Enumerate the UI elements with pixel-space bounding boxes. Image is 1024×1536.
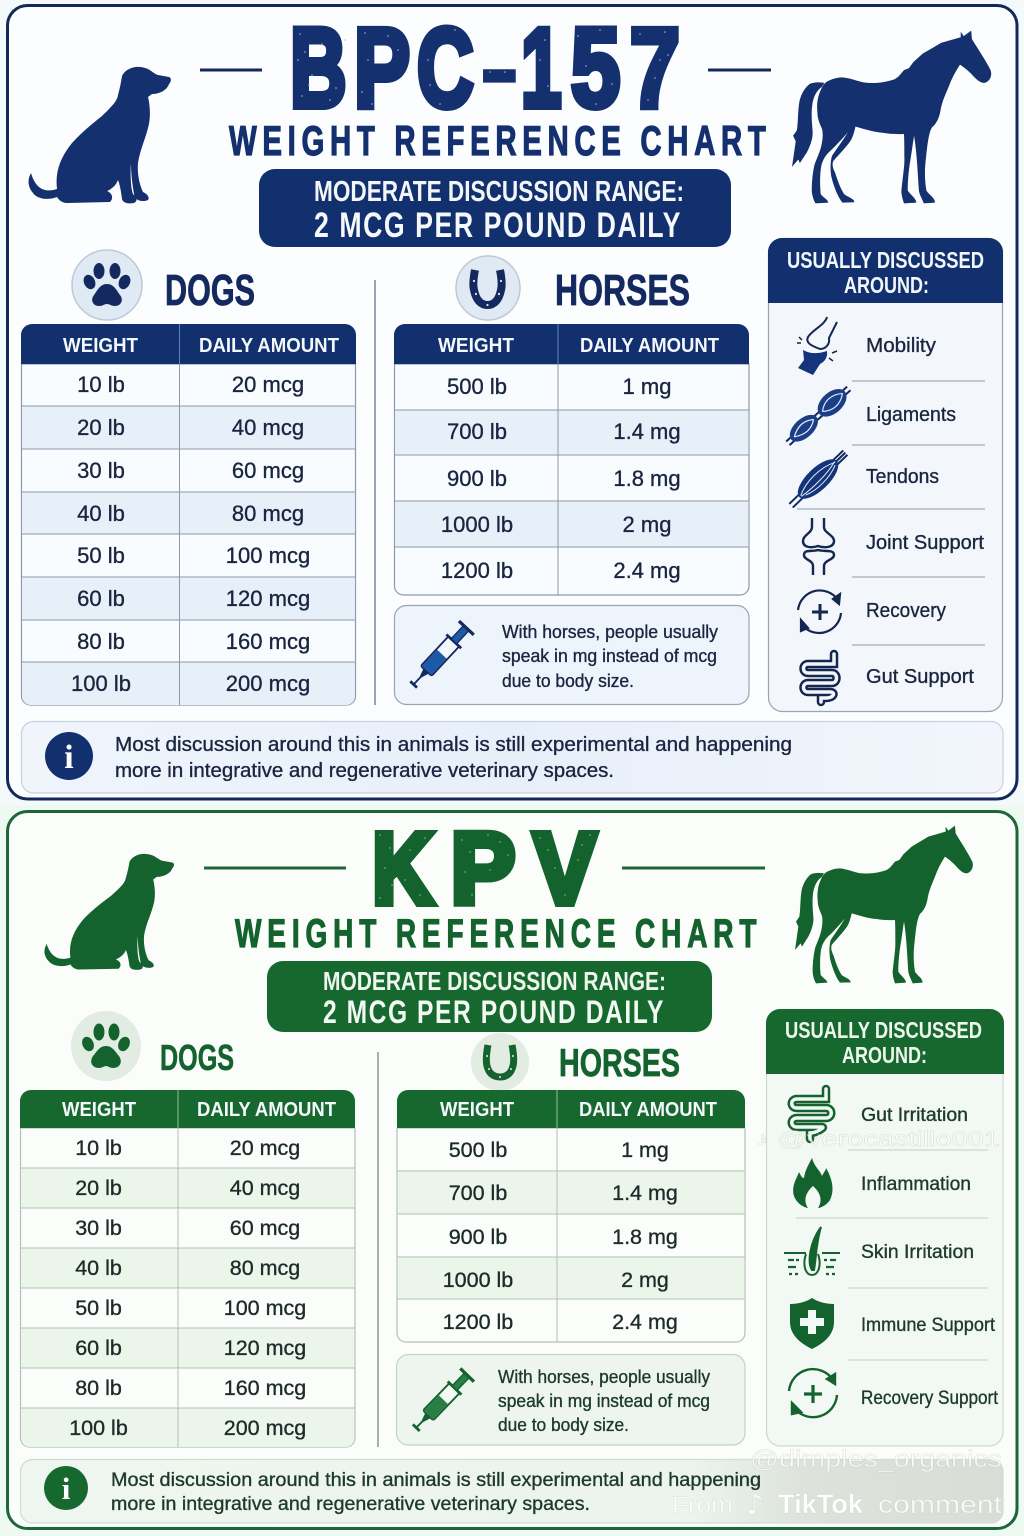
table header: WEIGHT bbox=[62, 1099, 136, 1121]
table body rows bbox=[22, 364, 356, 705]
table body rows: 500 lb bbox=[447, 374, 507, 399]
note text bbox=[502, 621, 719, 691]
panel: usually discussed around bbox=[766, 1009, 1004, 1446]
item: gut support bbox=[804, 654, 974, 702]
table body rows: 10 lb bbox=[77, 372, 125, 397]
note text: With horses, people usually bbox=[498, 1367, 710, 1387]
table body rows: 100 mcg bbox=[226, 543, 310, 568]
title: KPV: P bbox=[451, 812, 515, 924]
icon: joint bbox=[803, 518, 834, 575]
title: BPC-157: - bbox=[478, 4, 521, 129]
title: BPC-157: P bbox=[354, 5, 410, 130]
decorative title dash right bbox=[622, 866, 765, 870]
table header bbox=[20, 1090, 355, 1128]
item: recovery support bbox=[789, 1369, 999, 1417]
table body rows: 1 mg bbox=[621, 1138, 669, 1162]
panel: KPV bbox=[8, 812, 1017, 1528]
table body rows: 60 mcg bbox=[230, 1216, 300, 1240]
icon: intestines bbox=[792, 1089, 831, 1139]
table body rows: 50 lb bbox=[75, 1296, 122, 1320]
side panel header: AROUND: bbox=[842, 1042, 927, 1068]
note text: speak in mg instead of mcg bbox=[498, 1391, 710, 1411]
table body rows: 700 lb bbox=[449, 1181, 507, 1205]
note text bbox=[498, 1367, 710, 1435]
title: BPC-157: 1 bbox=[521, 6, 561, 131]
table body rows bbox=[397, 1128, 745, 1342]
icon: info bbox=[44, 1466, 88, 1510]
item: gut support: Gut Support bbox=[866, 666, 974, 688]
title: KPV: K bbox=[372, 812, 433, 925]
icon: horseshoe bbox=[456, 256, 520, 320]
table body rows: 60 mcg bbox=[232, 458, 304, 483]
table header bbox=[21, 324, 356, 364]
icon: horseshoe bbox=[471, 1033, 529, 1091]
heading: dogs: DOGS bbox=[165, 266, 255, 315]
item: joint support: Joint Support bbox=[866, 532, 984, 554]
info text: Most discussion around this in animals is still experimental and happening bbox=[111, 1470, 761, 1491]
heading: horses: HORSES bbox=[559, 1042, 680, 1085]
item: skin irritation: Skin Irritation bbox=[861, 1242, 974, 1263]
title: KPV bbox=[372, 812, 596, 925]
item: tendons bbox=[783, 445, 939, 513]
info text: more in integrative and regenerative veterinary spaces. bbox=[115, 760, 614, 782]
info text: Most discussion around this in animals is still experimental and happening bbox=[115, 734, 792, 756]
table body rows bbox=[20, 1128, 355, 1447]
callout line 2: 2 MCG PER POUND DAILY bbox=[314, 206, 682, 245]
table body rows: 1200 lb bbox=[441, 558, 513, 583]
table body rows: 1 mg bbox=[623, 374, 671, 399]
title: BPC-157: 7 bbox=[630, 6, 680, 131]
table body rows: 200 mcg bbox=[226, 671, 310, 696]
table: horses weight and daily amount bbox=[397, 1090, 745, 1342]
watermark: TikTok comment: From bbox=[672, 1492, 733, 1519]
item: mobility: Mobility bbox=[866, 335, 936, 357]
info text bbox=[115, 734, 792, 782]
item: gut irritation bbox=[792, 1089, 968, 1139]
info text: more in integrative and regenerative veterinary spaces. bbox=[111, 1494, 590, 1515]
heading: horses: HORSES bbox=[555, 266, 690, 315]
title: BPC-157: 5 bbox=[571, 7, 620, 131]
watermark: handle top: ♪ @verocastillo001 bbox=[755, 1128, 1000, 1151]
divider bbox=[374, 280, 376, 705]
table body rows: 1.4 mg bbox=[613, 419, 681, 444]
table body rows: 1.8 mg bbox=[612, 1225, 678, 1249]
icon: horse silhouette bbox=[795, 826, 973, 983]
item: inflammation: Inflammation bbox=[861, 1174, 971, 1195]
title: BPC-157: B bbox=[290, 6, 347, 131]
table body rows: 50 lb bbox=[77, 543, 125, 568]
subtitle: weight reference chart: WEIGHT REFERENCE CHART bbox=[235, 912, 756, 956]
subtitle: weight reference chart: WEIGHT REFERENCE CHART bbox=[229, 117, 766, 164]
table header: WEIGHT bbox=[438, 335, 514, 357]
table body rows: 700 lb bbox=[447, 419, 507, 444]
item: recovery support: Recovery Support bbox=[861, 1388, 999, 1409]
table body rows: 2.4 mg bbox=[612, 1310, 678, 1334]
callout line 1: MODERATE DISCUSSION RANGE: bbox=[323, 966, 666, 996]
icon: dog paw bbox=[72, 250, 142, 320]
table body rows: 500 lb bbox=[449, 1138, 507, 1162]
title: BPC-157 bbox=[290, 4, 680, 131]
icon: recovery cycle bbox=[798, 590, 841, 633]
table body rows: 10 lb bbox=[75, 1136, 122, 1160]
table body rows: 160 mcg bbox=[226, 629, 310, 654]
table header: DAILY AMOUNT bbox=[579, 1099, 717, 1121]
table body rows: 1.8 mg bbox=[613, 466, 681, 491]
icon: info bbox=[45, 732, 93, 780]
item: tendons: Tendons bbox=[866, 466, 939, 488]
side panel header bbox=[768, 238, 1003, 303]
item: ligaments: Ligaments bbox=[866, 404, 956, 426]
item: gut irritation: Gut Irritation bbox=[861, 1105, 968, 1126]
callout: moderate discussion range bbox=[267, 961, 712, 1032]
table body rows: 20 lb bbox=[77, 415, 125, 440]
table body rows: 100 lb bbox=[69, 1416, 128, 1440]
table body rows: 160 mcg bbox=[224, 1376, 306, 1400]
table body rows: 80 mcg bbox=[230, 1256, 300, 1280]
icon: flame bbox=[793, 1158, 833, 1208]
table header: WEIGHT bbox=[440, 1099, 514, 1121]
divider bbox=[377, 1052, 379, 1447]
table header: DAILY AMOUNT bbox=[197, 1099, 336, 1121]
note text: due to body size. bbox=[502, 670, 634, 691]
icon: dog silhouette bbox=[44, 854, 174, 970]
title: KPV: V bbox=[534, 814, 596, 925]
table: horses weight and daily amount bbox=[394, 324, 749, 595]
icon: tendons bbox=[783, 445, 853, 513]
table body rows: 1000 lb bbox=[443, 1268, 513, 1292]
table body rows: 2.4 mg bbox=[613, 558, 681, 583]
panel: BPC-157 bbox=[8, 4, 1017, 799]
item: joint support bbox=[803, 518, 984, 575]
icon: ligaments bbox=[781, 380, 855, 451]
icon: info: i bbox=[64, 739, 74, 776]
table header: DAILY AMOUNT bbox=[580, 335, 719, 357]
callout: moderate discussion range bbox=[259, 169, 731, 247]
note text: due to body size. bbox=[498, 1415, 629, 1435]
table body rows: 120 mcg bbox=[226, 586, 310, 611]
table header bbox=[397, 1090, 745, 1128]
table body rows: 2 mg bbox=[623, 512, 671, 537]
title: BPC-157: C bbox=[417, 6, 474, 131]
table body rows: 40 lb bbox=[75, 1256, 122, 1280]
item: immune support: Immune Support bbox=[861, 1315, 996, 1336]
side panel header bbox=[766, 1009, 1004, 1074]
table body rows: 1200 lb bbox=[443, 1310, 513, 1334]
table body rows: 20 lb bbox=[75, 1176, 122, 1200]
decorative title dash right bbox=[708, 68, 771, 72]
item: ligaments bbox=[781, 380, 956, 451]
icon: horse silhouette bbox=[792, 31, 991, 203]
table body rows: 40 mcg bbox=[232, 415, 304, 440]
icon: dog paw bbox=[71, 1011, 141, 1081]
icon: info: i bbox=[62, 1471, 71, 1506]
item: skin irritation bbox=[784, 1227, 974, 1275]
item: recovery bbox=[798, 590, 946, 633]
heading: dogs: DOGS bbox=[160, 1037, 234, 1078]
callout line 2: 2 MCG PER POUND DAILY bbox=[323, 994, 665, 1030]
icon: dog silhouette bbox=[29, 67, 171, 203]
watermark: TikTok comment bbox=[672, 1488, 1002, 1521]
table body rows: 900 lb bbox=[447, 466, 507, 491]
table body rows: 120 mcg bbox=[224, 1336, 306, 1360]
table header: DAILY AMOUNT bbox=[199, 335, 339, 357]
table body rows: 80 lb bbox=[75, 1376, 122, 1400]
table body rows: 200 mcg bbox=[224, 1416, 306, 1440]
table header bbox=[394, 324, 749, 364]
table body rows: 80 mcg bbox=[232, 501, 304, 526]
table body rows: 1000 lb bbox=[441, 512, 513, 537]
watermark: TikTok comment: ♪ bbox=[746, 1488, 764, 1521]
info bar bbox=[20, 1460, 1003, 1523]
table body rows: 100 lb bbox=[71, 671, 131, 696]
table body rows: 20 mcg bbox=[230, 1136, 300, 1160]
icon: syringe bbox=[406, 621, 474, 691]
watermark: TikTok comment: TikTok bbox=[778, 1489, 864, 1519]
item: immune support bbox=[790, 1298, 996, 1349]
table body rows: 20 mcg bbox=[232, 372, 304, 397]
icon: shield bbox=[790, 1298, 834, 1349]
info bar bbox=[22, 722, 1003, 793]
panel: usually discussed around bbox=[768, 238, 1003, 712]
note text: speak in mg instead of mcg bbox=[502, 645, 717, 666]
table body rows: 30 lb bbox=[75, 1216, 122, 1240]
table body rows: 100 mcg bbox=[224, 1296, 306, 1320]
callout line 1: MODERATE DISCUSSION RANGE: bbox=[314, 176, 684, 208]
table body rows: 60 lb bbox=[77, 586, 125, 611]
note text: With horses, people usually bbox=[502, 621, 719, 642]
icon: intestines bbox=[804, 654, 836, 702]
decorative title dash left bbox=[204, 866, 346, 870]
icon: recovery cycle bbox=[789, 1369, 837, 1417]
table header: WEIGHT bbox=[63, 335, 138, 357]
note: horses mg bbox=[396, 1354, 745, 1445]
table body rows: 30 lb bbox=[77, 458, 125, 483]
decorative title dash left bbox=[200, 68, 262, 72]
table body rows: 1.4 mg bbox=[612, 1181, 678, 1205]
table body rows bbox=[394, 364, 749, 595]
table body rows: 900 lb bbox=[449, 1225, 507, 1249]
watermark: handle bottom: @dimples_organics bbox=[750, 1446, 1002, 1473]
item: mobility bbox=[797, 317, 936, 375]
table body rows: 40 mcg bbox=[230, 1176, 300, 1200]
table body rows: 40 lb bbox=[77, 501, 125, 526]
note: horses mg bbox=[394, 606, 749, 704]
item: inflammation bbox=[793, 1158, 971, 1208]
table: dogs weight and daily amount bbox=[20, 1090, 355, 1447]
watermark: TikTok comment: comment bbox=[878, 1491, 1002, 1519]
item: recovery: Recovery bbox=[866, 600, 946, 622]
table body rows: 80 lb bbox=[77, 629, 125, 654]
table: dogs weight and daily amount bbox=[21, 324, 356, 705]
table body rows: 60 lb bbox=[75, 1336, 122, 1360]
table body rows: 2 mg bbox=[621, 1268, 669, 1292]
icon: syringe bbox=[409, 1368, 474, 1434]
info text bbox=[111, 1470, 761, 1515]
side panel header: AROUND: bbox=[844, 272, 929, 298]
icon: skin follicle bbox=[784, 1227, 840, 1275]
icon: knee joint bbox=[797, 317, 837, 375]
